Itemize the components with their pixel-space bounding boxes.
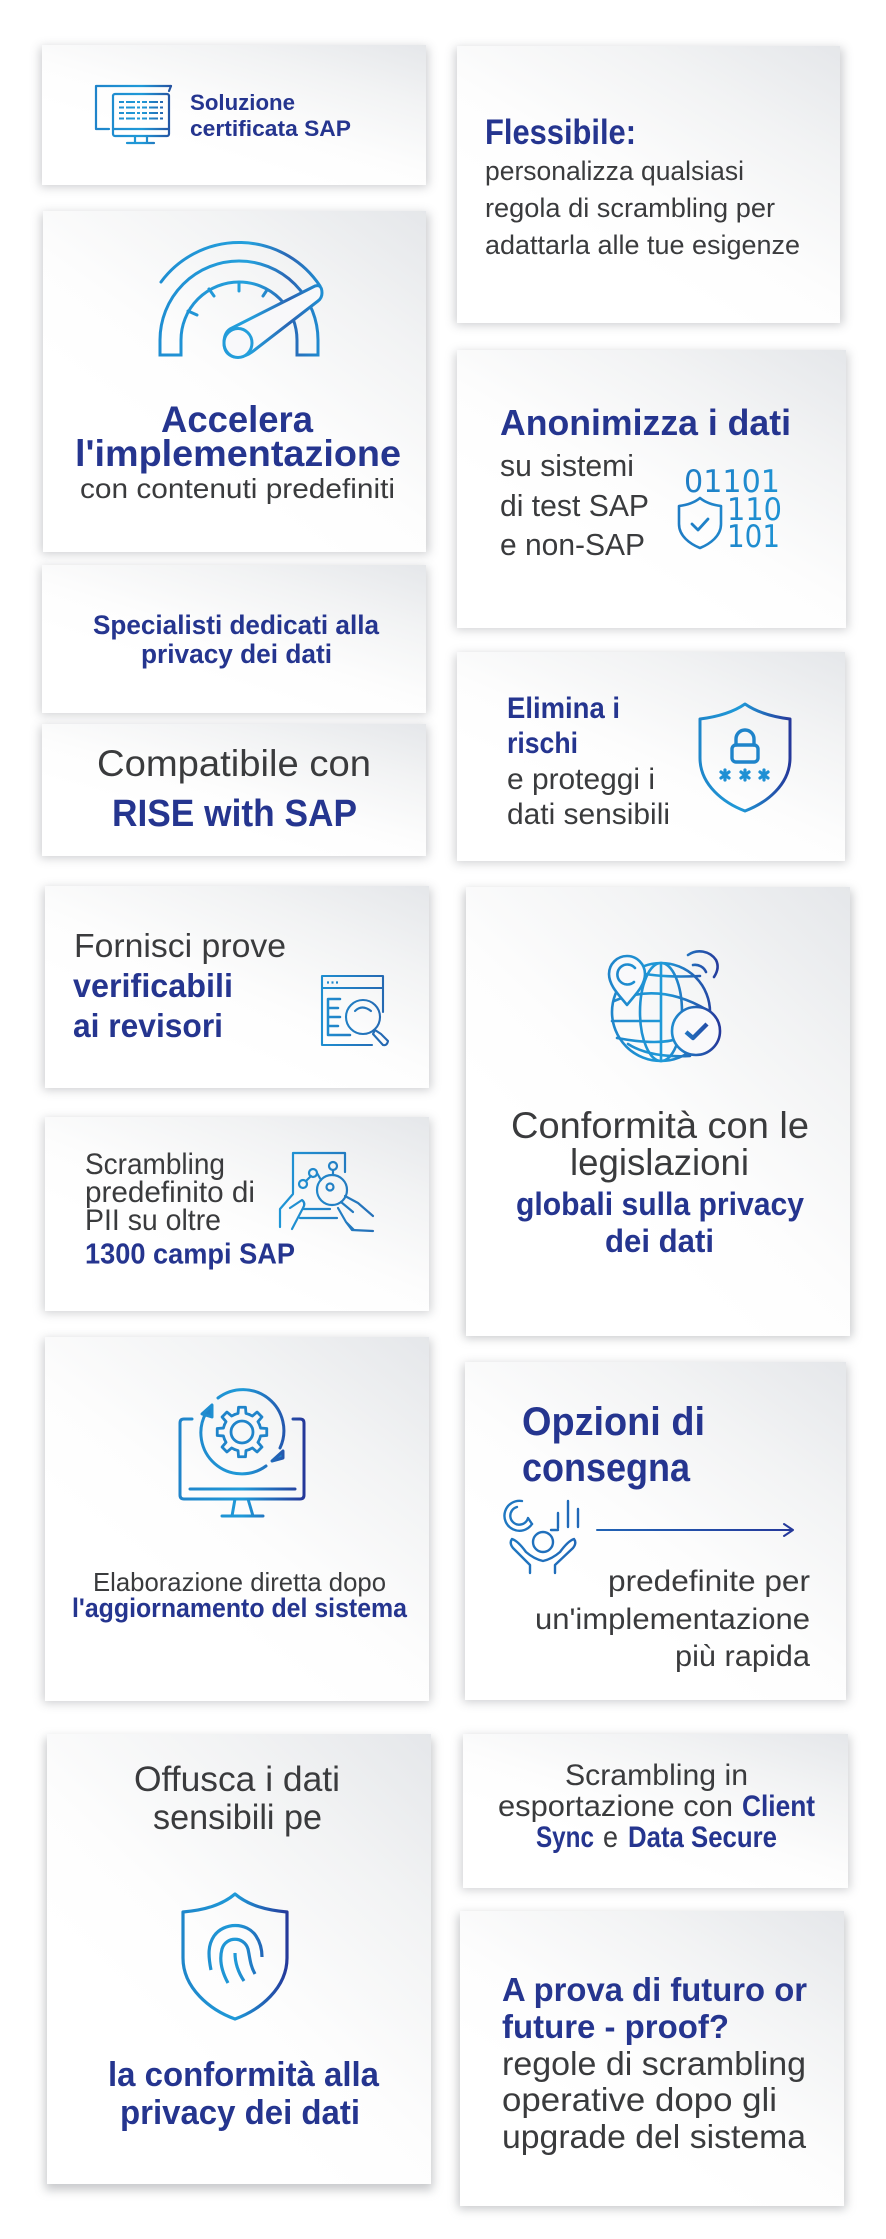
text: conformita con le legislazioni — [511, 1105, 809, 1183]
text: proteggi i dati: dati sensibili — [507, 798, 670, 831]
panel: compatibile RISE — [40, 724, 428, 858]
panel: specialisti dedicati — [40, 565, 428, 715]
panel: a prova di futuro — [458, 1911, 846, 2209]
icon: shield with lock — [700, 704, 790, 811]
text: scrambling in esportazione: e — [603, 1821, 618, 1854]
icon: binary digits with shield — [679, 464, 782, 555]
heading: specialisti dedicati: privacy dei dati — [141, 639, 332, 669]
text: predefinite per: predefinite per — [608, 1565, 810, 1598]
heading: la conformità alla privacy dei dati: la conformità alla — [108, 2056, 380, 2094]
text: scrambling in esportazione — [498, 1759, 815, 1854]
heading: elimina i rischi: Elimina i — [507, 692, 620, 725]
text: predefinite per: un'implementazione — [535, 1603, 810, 1636]
heading: accelera implementazione — [75, 399, 401, 474]
text: su sistemi di test: e non-SAP — [500, 527, 645, 562]
icon: binary digits with shield: 101 — [727, 519, 780, 555]
text: personalizza regola: personalizza qualsiasi — [485, 156, 744, 186]
heading: aggiornamento del sistema: l'aggiornamento del sistema — [72, 1593, 408, 1623]
text: regole di scrambling — [502, 2045, 807, 2155]
heading: a prova di futuro: future - proof? — [502, 2008, 729, 2045]
heading: a prova di futuro: A prova di futuro or — [502, 1971, 807, 2008]
heading: la conformità alla privacy dei dati — [108, 2056, 380, 2132]
heading: specialisti dedicati: Specialisti dedicati alla — [93, 610, 380, 640]
text: compatibile con: Compatibile con — [97, 743, 371, 784]
text: proteggi i dati: e proteggi i — [507, 763, 655, 796]
heading: anonimizza i dati: Anonimizza i dati — [500, 402, 791, 443]
panel: elimina i rischi — [455, 652, 847, 863]
panel: scrambling predefinito — [43, 1117, 431, 1313]
heading: a prova di futuro — [502, 1971, 807, 2045]
icon: shield with fingerprint — [183, 1894, 287, 2019]
icon: speedometer gauge — [160, 243, 322, 358]
text: scrambling in esportazione: esportazione con — [498, 1790, 733, 1823]
panel: soluzione certificata SAP — [40, 45, 428, 187]
text: offusca i dati: sensibili pe — [153, 1798, 322, 1837]
panel: fornisci prove — [43, 886, 431, 1090]
text: con contenuti predefiniti: con contenuti predefiniti — [80, 473, 395, 504]
text: predefinite per: più rapida — [675, 1640, 810, 1673]
heading: elimina i rischi: rischi — [507, 727, 578, 760]
text: su sistemi di test: su sistemi — [500, 448, 634, 483]
text: elaborazione diretta dopo: Elaborazione diretta dopo — [93, 1567, 386, 1597]
heading: verificabili ai revisori — [73, 967, 233, 1044]
panel: scrambling esportazione — [461, 1734, 850, 1890]
text: scrambling in esportazione: Scrambling in — [565, 1759, 748, 1792]
panel: elaborazione diretta — [43, 1337, 431, 1703]
heading: la conformità alla privacy dei dati: privacy dei dati — [120, 2094, 360, 2132]
icon: person with charts — [504, 1501, 578, 1573]
panel: accelera implementazione — [41, 211, 429, 554]
heading: globali sulla privacy: globali sulla privacy — [516, 1186, 804, 1222]
text: scrambling predefinito: PII su oltre — [85, 1204, 221, 1237]
text: su sistemi di test — [500, 448, 649, 562]
text: fornisci prove: Fornisci prove — [74, 927, 286, 964]
heading: opzioni di consegna — [522, 1400, 705, 1490]
text: conformita con le legislazioni: legislazioni — [570, 1142, 749, 1183]
text: scrambling predefinito: Scrambling — [85, 1148, 225, 1181]
heading: accelera implementazione: Accelera — [161, 399, 313, 440]
text: scrambling in esportazione: Data Secure — [628, 1821, 777, 1854]
icon: monitor with code — [96, 86, 171, 143]
panel: flessibile — [455, 46, 843, 325]
heading: opzioni di consegna: Opzioni di — [522, 1400, 705, 1444]
heading: soluzione certificata SAP: certificata SAP — [190, 116, 351, 141]
heading: flessibile: Flessibile: — [485, 113, 636, 152]
text: conformita con le legislazioni: Conformità con le — [511, 1105, 809, 1146]
text: offusca i dati: Offusca i dati — [134, 1760, 340, 1799]
text: regole di scrambling: upgrade del sistema — [502, 2118, 807, 2155]
heading: elimina i rischi — [507, 692, 620, 760]
icon: globe with pins and check — [609, 951, 720, 1061]
heading: 1300 campi SAP: 1300 campi SAP — [85, 1238, 295, 1270]
heading: globali sulla privacy — [516, 1186, 804, 1259]
text: personalizza regola — [485, 156, 800, 260]
heading: globali sulla privacy: dei dati — [605, 1223, 714, 1259]
heading: RISE with SAP: RISE with SAP — [112, 793, 357, 835]
text: scrambling predefinito: predefinito di — [85, 1176, 255, 1209]
text: predefinite per — [535, 1565, 810, 1673]
heading: specialisti dedicati — [93, 610, 380, 669]
text: scrambling predefinito — [85, 1148, 255, 1237]
text: scrambling in esportazione: Sync — [536, 1821, 594, 1854]
arrow: delivery arrow — [597, 1524, 793, 1536]
text: su sistemi di test: di test SAP — [500, 488, 649, 523]
panel: offusca i dati — [45, 1734, 433, 2190]
heading: verificabili ai revisori: ai revisori — [73, 1007, 223, 1044]
text: personalizza regola: regola di scrambling per — [485, 193, 775, 223]
text: scrambling in esportazione: Client — [742, 1790, 815, 1823]
icon: document with magnifier — [322, 976, 388, 1045]
panel: opzioni di consegna — [463, 1362, 848, 1702]
heading: opzioni di consegna: consegna — [522, 1446, 691, 1490]
text: offusca i dati — [134, 1760, 340, 1837]
text: personalizza regola: adattarla alle tue esigenze — [485, 230, 800, 260]
heading: verificabili ai revisori: verificabili — [73, 967, 233, 1004]
panel: conformita legislazioni — [464, 887, 852, 1338]
heading: accelera implementazione: l'implementazione — [75, 433, 401, 474]
icon: binary digits with shield: 110 — [727, 492, 782, 528]
heading: soluzione certificata SAP — [190, 90, 351, 141]
text: proteggi i dati — [507, 763, 670, 831]
icon: tablet with hands — [280, 1153, 373, 1231]
text: regole di scrambling: operative dopo gli — [502, 2081, 777, 2118]
text: regole di scrambling: regole di scrambling — [502, 2045, 806, 2082]
icon: monitor with gear — [180, 1390, 304, 1516]
icon: binary digits with shield: 01101 — [684, 464, 780, 500]
panel: anonimizza i dati — [455, 350, 848, 630]
heading: soluzione certificata SAP: Soluzione — [190, 90, 295, 115]
